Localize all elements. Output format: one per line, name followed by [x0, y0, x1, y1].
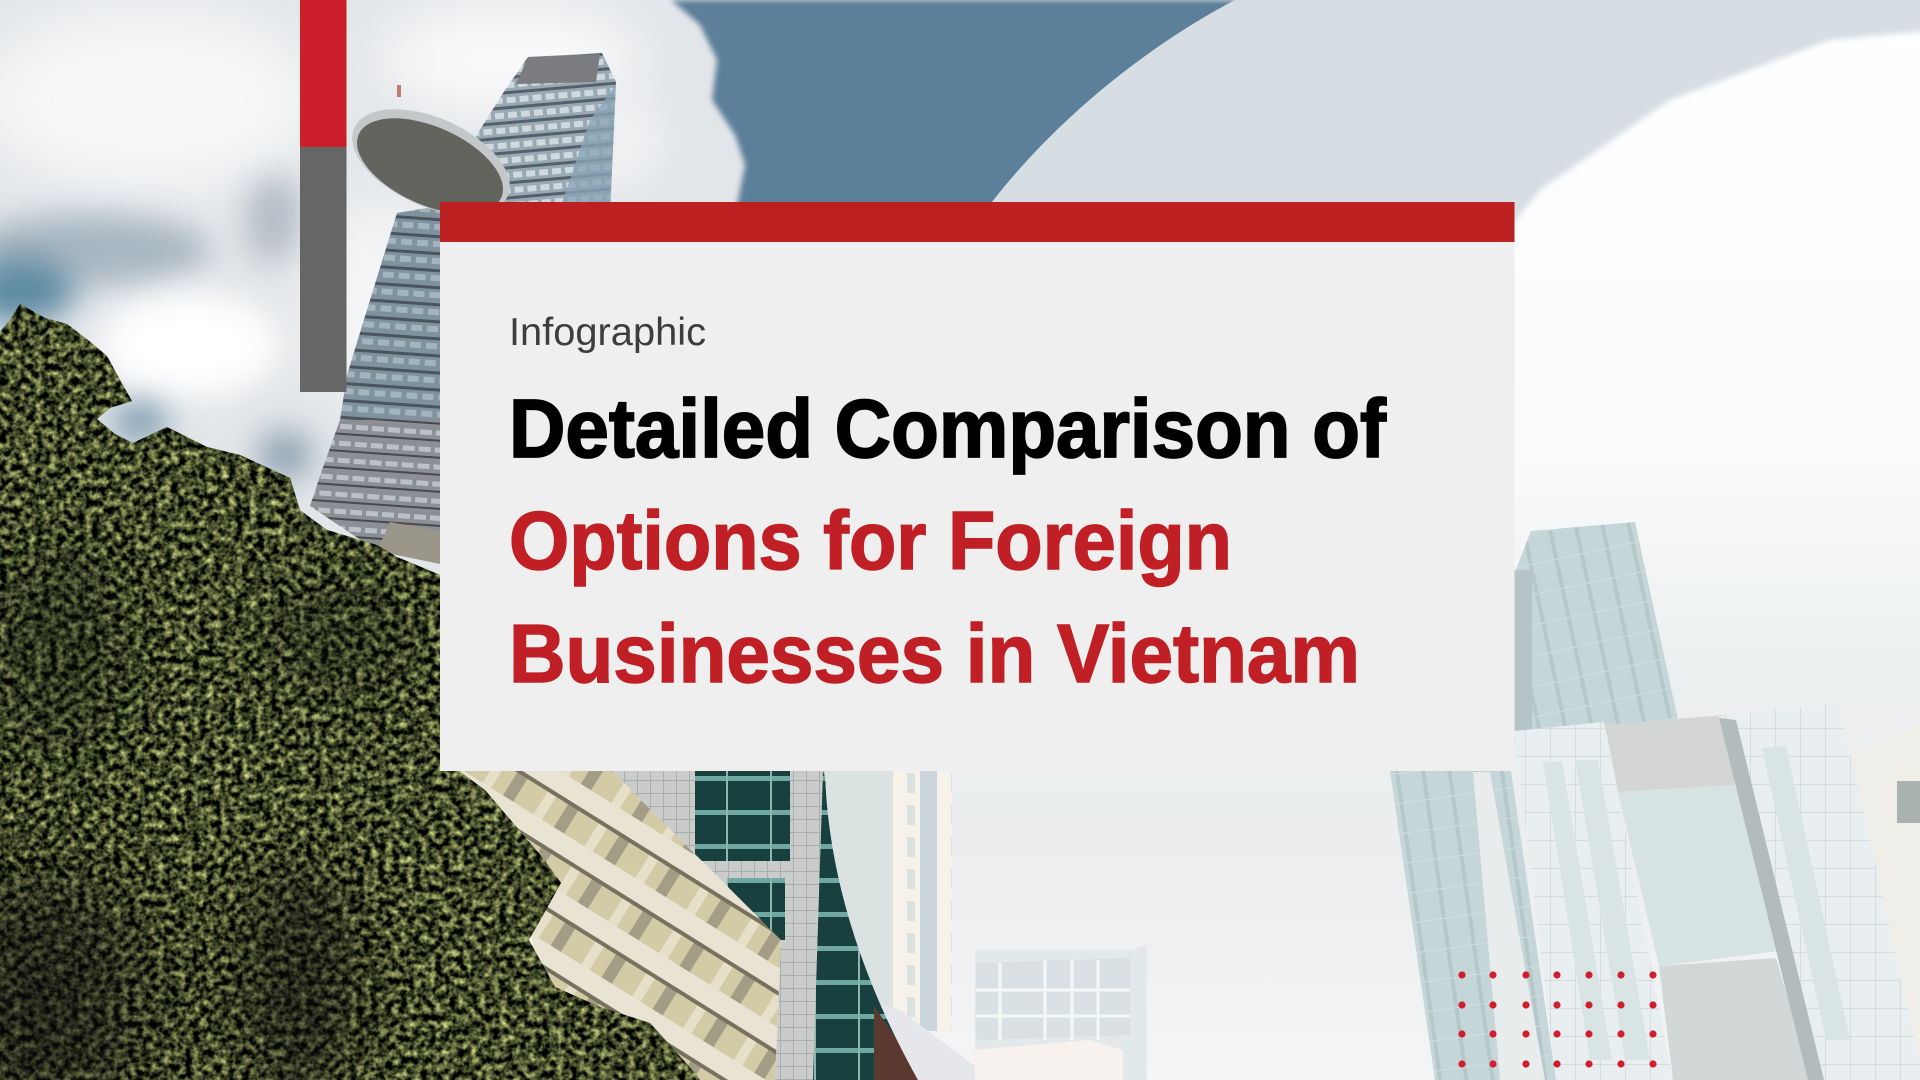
- red segment: [300, 0, 346, 147]
- central grid building: [1514, 722, 1673, 1080]
- card red header strip: [440, 202, 1514, 242]
- dot grid decoration: [1458, 971, 1657, 1068]
- eyebrow label: Infographic: [509, 311, 706, 354]
- card background: [440, 202, 1514, 771]
- lower dark glazing: [1659, 958, 1812, 1080]
- title line 1: Detailed Comparison of: [509, 382, 1386, 475]
- title line 2: Options for Foreign: [509, 494, 1232, 587]
- tall cream building: [825, 771, 952, 1036]
- photo: tree foliage: [0, 300, 720, 1080]
- teal tower: [1514, 522, 1680, 740]
- faded photo inside the overlay curve: [825, 0, 1920, 1080]
- low white building: [880, 1003, 975, 1080]
- central glass curtain wall: [1618, 785, 1779, 966]
- left glass tower: [1390, 771, 1556, 1080]
- panel: title card: [440, 202, 1514, 771]
- photo: apartment block and glass buildings: [450, 771, 925, 1080]
- sky tint: [825, 0, 1920, 1080]
- far right beige building: [1875, 781, 1920, 1050]
- grey-blue sky at top right: [992, 0, 1920, 225]
- left accent bar: [300, 0, 346, 392]
- photo: Bitexco tower: [310, 53, 616, 565]
- photo: sky and clouds: [0, 0, 1300, 620]
- small glass building: [973, 945, 1147, 1080]
- roof section: [1605, 715, 1735, 792]
- right grid building: [1719, 703, 1920, 1080]
- title line 3: Businesses in Vietnam: [509, 607, 1360, 700]
- gray segment: [300, 147, 346, 392]
